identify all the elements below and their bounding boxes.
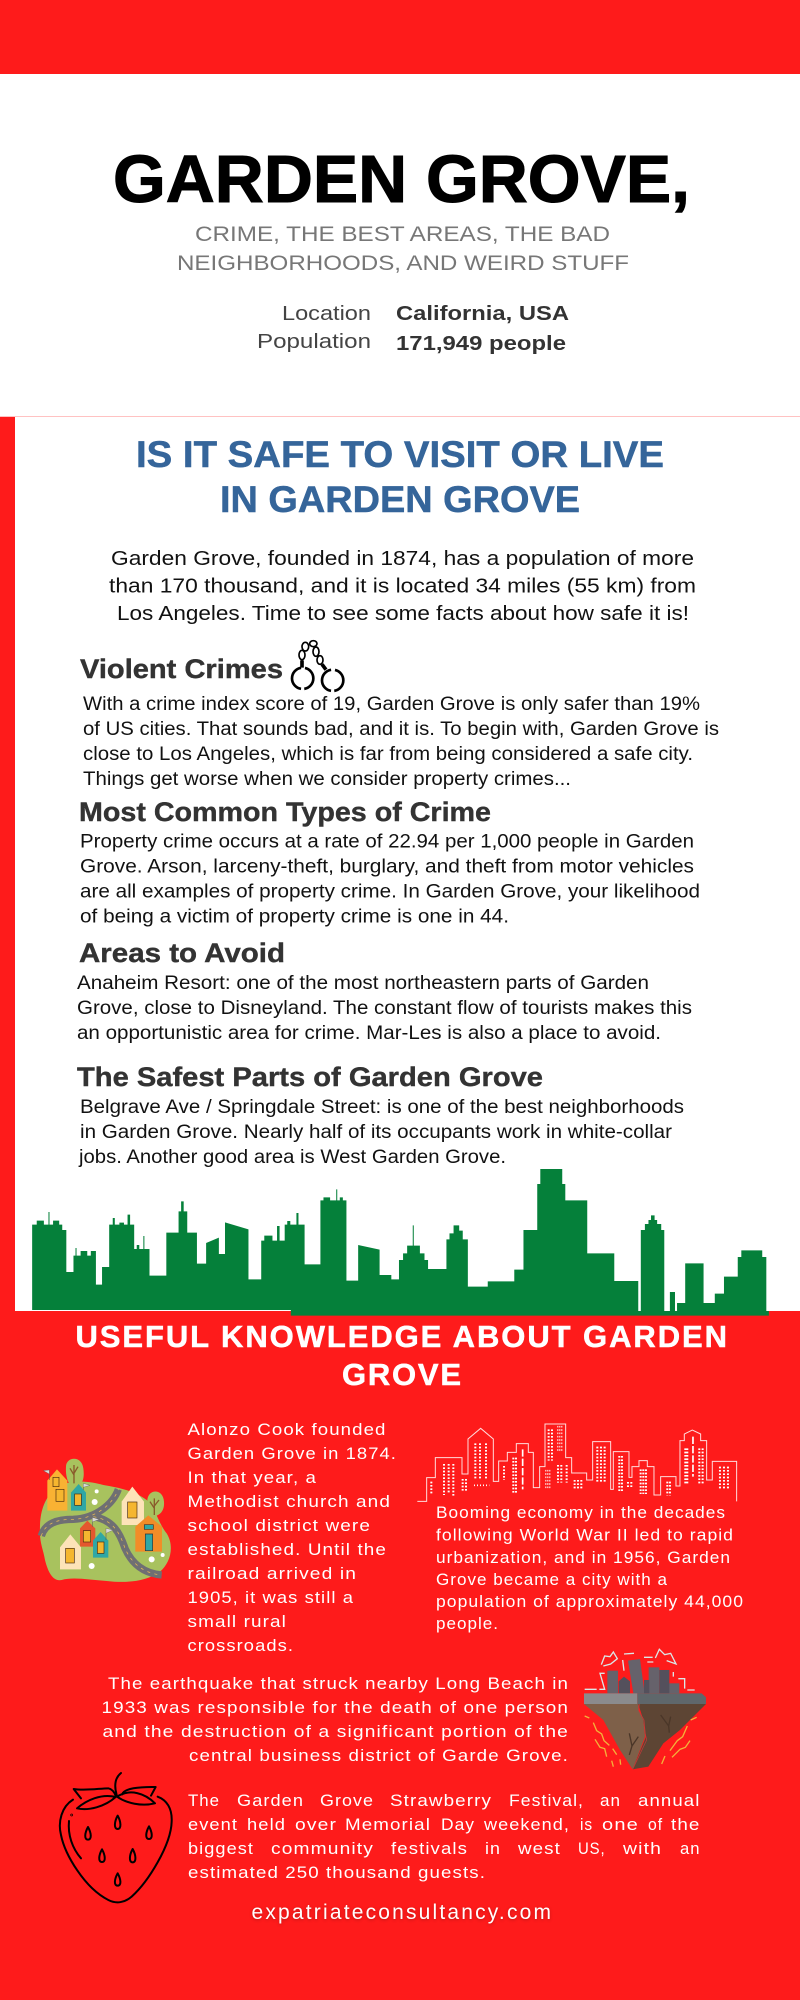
text: founding: Garden Grove in 1874. [188,1444,397,1463]
subtitle: NEIGHBORHOODS, AND WEIRD STUFF [177,252,629,275]
text: violent crimes [83,694,719,790]
icon: handcuffs [292,641,343,691]
section heading: IS IT SAFE TO VISIT OR LIVE [136,434,664,475]
text: areas to avoid [77,973,692,1044]
text: founding: established. Until the [188,1540,387,1559]
panel: safety section [0,416,800,1311]
text: violent crimes: Things get worse when we consider property crimes... [83,769,571,790]
heading: violent crimes: Violent Crimes [80,654,283,684]
website footer: expatriateconsultancy.com [252,1901,551,1924]
heading: most common types: Most Common Types of Crime [79,797,491,827]
section heading [136,434,664,520]
text: strawberry festival: Memorial [345,1815,431,1834]
section heading: IN GARDEN GROVE [220,479,580,520]
text: safest parts [78,1097,684,1168]
text: post-war boom: urbanization, and in 1956, Garden [436,1548,731,1567]
text: strawberry festival: biggest [188,1839,254,1858]
text: most common types: of being a victim of property crime is one in 44. [80,906,509,928]
text: founding: Methodist church and [188,1492,391,1511]
icon: outlined city skyline [417,1424,737,1501]
text: strawberry festival: Strawberry [390,1791,492,1810]
panel: useful knowledge [40,1319,744,1924]
intro text: Los Angeles. Time to see some facts about how safe it is! [117,602,689,625]
text: strawberry festival: the [671,1815,700,1834]
text: strawberry festival: event [188,1815,238,1834]
intro text [109,547,696,625]
text: post-war boom: population of approximately 44,000 [436,1592,744,1611]
text: most common types: Property crime occurs at a rate of 22.94 per 1,000 people in Garden [80,832,694,852]
text: post-war boom: Booming economy in the decades [436,1503,726,1522]
text: strawberry festival: an [600,1791,621,1810]
text: strawberry festival: held [247,1815,286,1834]
text: strawberry festival: Garden [237,1791,304,1810]
text: strawberry festival: estimated 250 thousand guests. [188,1863,486,1882]
key facts: Population [257,330,371,353]
key facts: Location [282,302,371,325]
text: strawberry festival: Festival, [509,1791,584,1810]
text: strawberry festival: The [188,1791,220,1810]
panel: white header [0,74,800,416]
text: strawberry festival: festivals [391,1839,468,1858]
text: violent crimes: of US cities. That sounds bad, and it is. To begin with, Garden Grove is [83,719,719,740]
subtitle [177,223,629,275]
title: GARDEN GROVE, [113,142,690,217]
text: earthquake: and the destruction of a significant portion of the [102,1722,569,1741]
text: post-war boom: following World War II led to rapid [436,1526,734,1544]
subtitle: CRIME, THE BEST AREAS, THE BAD [195,223,610,246]
text: founding [188,1420,397,1655]
text: strawberry festival [188,1791,700,1882]
intro text: Garden Grove, founded in 1874, has a population of more [111,547,694,570]
text: strawberry festival: is [580,1815,593,1834]
key facts [257,302,569,355]
text: most common types: Grove. Arson, larceny-theft, burglary, and theft from motor vehicles [80,856,694,878]
text: earthquake: central business district of Garde Grove. [189,1746,569,1765]
intro text: than 170 thousand, and it is located 34 miles (55 km) from [109,574,696,598]
text: safest parts: Belgrave Ave / Springdale Street: is one of the best neighborhoods [80,1097,684,1118]
houses [47,1469,67,1511]
text: founding: Alonzo Cook founded [188,1420,386,1439]
section heading: USEFUL KNOWLEDGE ABOUT GARDEN [76,1319,727,1354]
icon: village illustration [40,1459,171,1582]
text: strawberry festival: Day [441,1815,475,1834]
text: most common types [80,832,700,928]
text: strawberry festival: annual [638,1791,700,1810]
text: strawberry festival: community [271,1839,374,1858]
text: areas to avoid: Anaheim Resort: one of the most northeastern parts of Garden [77,973,649,994]
text: safest parts: in Garden Grove. Nearly half of its occupants work in white-collar [80,1122,673,1143]
trees [66,1459,164,1516]
text: safest parts: jobs. Another good area is West Garden Grove. [78,1147,506,1168]
text: violent crimes: With a crime index score of 19, Garden Grove is only safer than 19% [83,694,700,715]
key facts: California, USA [396,302,569,325]
key facts: 171,949 people [396,332,566,355]
text: areas to avoid: an opportunistic area for crime. Mar-Les is also a place to avoid. [77,1023,661,1044]
text: earthquake: 1933 was responsible for the death of one person [102,1698,569,1717]
text: earthquake: The earthquake that struck nearby Long Beach in [108,1674,569,1693]
text: strawberry festival: with [622,1839,662,1858]
text: post-war boom [436,1503,744,1633]
text: strawberry festival: of [648,1815,663,1834]
text: areas to avoid: Grove, close to Disneyland. The constant flow of tourists makes this [77,998,692,1019]
text: strawberry festival: weekend, [483,1815,570,1834]
text: strawberry festival: US, [578,1839,606,1858]
text: founding: crossroads. [188,1636,294,1655]
text: post-war boom: people. [436,1614,499,1633]
text: strawberry festival: Grove [320,1791,374,1810]
text: most common types: are all examples of property crime. In Garden Grove, your likelihood [80,882,700,902]
heading: areas to avoid: Areas to Avoid [79,938,285,968]
text: strawberry festival: over [295,1815,337,1834]
text: post-war boom: Grove became a city with a [436,1570,668,1589]
chart: green city skyline [32,1169,769,1316]
text: founding: school district were [188,1516,371,1535]
heading: safest parts: The Safest Parts of Garden Grove [77,1062,543,1092]
text: founding: 1905, it was still a [188,1588,354,1607]
text: founding: small rural [188,1612,287,1631]
icon: earthquake [584,1649,706,1769]
text: violent crimes: close to Los Angeles, which is far from being considered a safe city. [83,744,693,765]
text: strawberry festival: an [680,1839,700,1858]
section heading: GROVE [342,1357,461,1392]
text: earthquake [102,1674,569,1765]
text: strawberry festival: one [602,1815,639,1834]
text: founding: In that year, a [188,1468,317,1487]
icon: strawberry [60,1773,172,1902]
text: strawberry festival: in [485,1839,501,1858]
section heading [76,1319,727,1392]
text: strawberry festival: west [517,1839,561,1858]
text: founding: railroad arrived in [188,1564,357,1583]
